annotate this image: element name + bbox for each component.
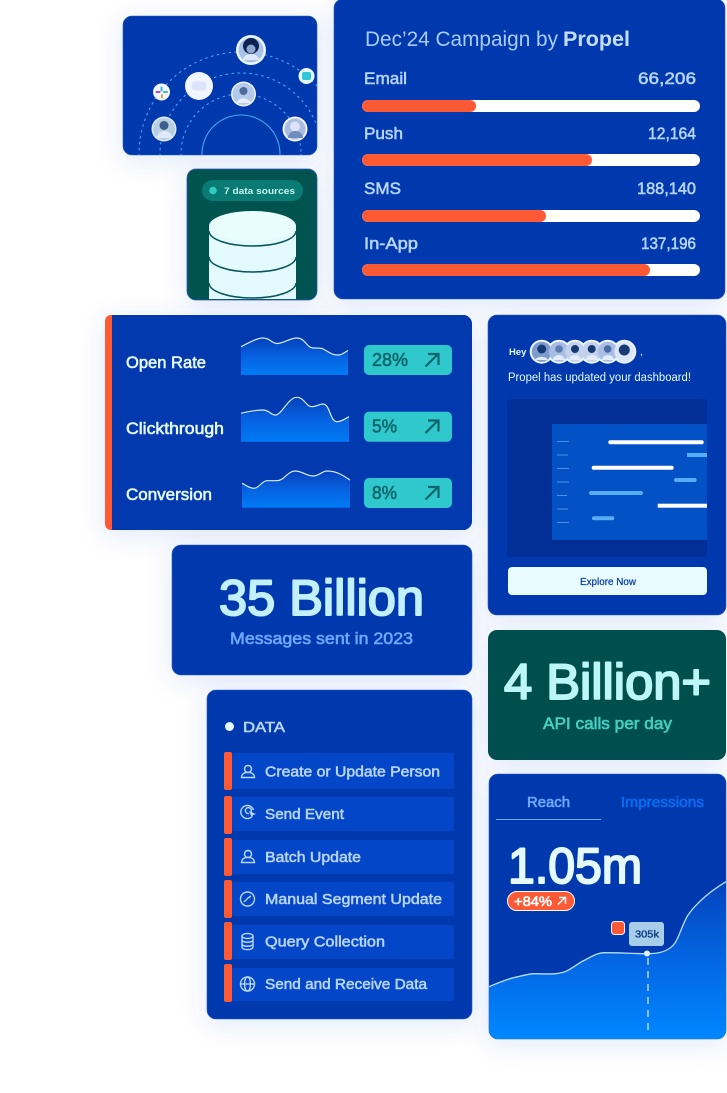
row: Email: Email: [364, 69, 407, 88]
panel: data actions: [207, 690, 472, 1019]
caption: API calls: API calls per day: [543, 714, 673, 733]
icon: teal chat badge: [298, 68, 314, 84]
greeting with avatars: Hey: [509, 347, 527, 358]
row: Push: [362, 124, 700, 166]
row: clickthrough: [126, 397, 452, 442]
row: send and receive data: Send and Receive Data: [265, 976, 428, 993]
button: explore now: Explore Now: [580, 577, 637, 588]
stat: 4 Billion+: 4 Billion+: [504, 654, 711, 710]
button: explore now: [508, 567, 707, 595]
icon: white app badge: [185, 72, 213, 100]
panel: 4 billion: [488, 630, 726, 760]
panel: campaign: [334, 0, 725, 299]
badge: +84%: [508, 892, 574, 910]
row: In-App: 137,196: [641, 234, 696, 253]
row: create or update person: [224, 752, 454, 790]
panel: rates: [105, 315, 472, 530]
row: clickthrough: 5%: [372, 416, 397, 436]
icon: avatar centre: [231, 82, 256, 106]
row: SMS: 188,140: [637, 179, 696, 198]
row: Push: 12,164: [648, 124, 696, 143]
row: SMS: [362, 179, 700, 222]
row: SMS: SMS: [364, 179, 401, 198]
panel: data sources: [187, 169, 317, 300]
icon: slack badge: [153, 84, 170, 100]
stat: 35 Billion: 35 Billion: [219, 570, 424, 626]
row: Push: Push: [364, 124, 403, 143]
row: conversion: [126, 471, 452, 508]
tab: reach: [496, 795, 601, 820]
icon: avatar left: [152, 116, 176, 142]
area chart: [489, 882, 726, 1040]
row: conversion: 8%: [372, 483, 397, 503]
row: send event: Send Event: [265, 806, 345, 823]
row: manual segment update: [224, 880, 454, 918]
tab: impressions: Impressions: [621, 795, 704, 811]
row: Email: [362, 69, 700, 112]
row: Email: 66,206: [638, 69, 696, 88]
row: In-App: [362, 234, 700, 276]
row: query collection: [224, 922, 454, 960]
row: query collection: Query Collection: [265, 934, 385, 950]
row: conversion: Conversion: [126, 485, 212, 504]
greeting with avatars: ,: [640, 347, 643, 358]
icon: database cylinder: [209, 211, 296, 300]
text: update message: Propel has updated your dashboard!: [508, 372, 691, 384]
row: send event: [224, 796, 454, 834]
row: In-App: In-App: [364, 234, 418, 253]
tab: reach: Reach: [527, 795, 570, 811]
row: open rate: Open Rate: [126, 353, 206, 372]
panel: dashboard update: [488, 315, 726, 615]
heading: DATA: [225, 719, 285, 736]
panel: 35 billion: [172, 545, 472, 675]
tooltip: 305k: [629, 922, 664, 946]
row: batch update: [224, 838, 454, 876]
heading: campaign: Dec’24 Campaign by: [365, 28, 558, 51]
panel: dashboard preview: [507, 399, 707, 557]
row: create or update person: Create or Update Person: [265, 764, 440, 780]
row: batch update: Batch Update: [265, 849, 361, 866]
icon: avatar top: [236, 35, 266, 65]
icon: avatar right: [282, 116, 308, 142]
panel: integrations network: [114, 12, 326, 168]
row: send and receive data: [224, 964, 454, 1002]
tooltip: 305k: 305k: [635, 928, 660, 940]
row: open rate: [126, 338, 452, 375]
heading: campaign: Propel: [563, 28, 630, 51]
legend marker: [612, 922, 624, 934]
caption: messages: Messages sent in 2023: [230, 629, 413, 648]
heading: DATA: DATA: [243, 719, 285, 736]
row: clickthrough: Clickthrough: [126, 419, 224, 438]
badge: +84%: +84%: [514, 894, 552, 909]
stat: 1.05m: 1.05m: [508, 838, 642, 894]
row: manual segment update: Manual Segment Update: [265, 891, 442, 908]
greeting with avatars: [509, 340, 643, 364]
badge: 7 data sources: 7 data sources: [224, 186, 295, 197]
panel: reach: [489, 774, 726, 1040]
row: open rate: 28%: [372, 350, 408, 370]
